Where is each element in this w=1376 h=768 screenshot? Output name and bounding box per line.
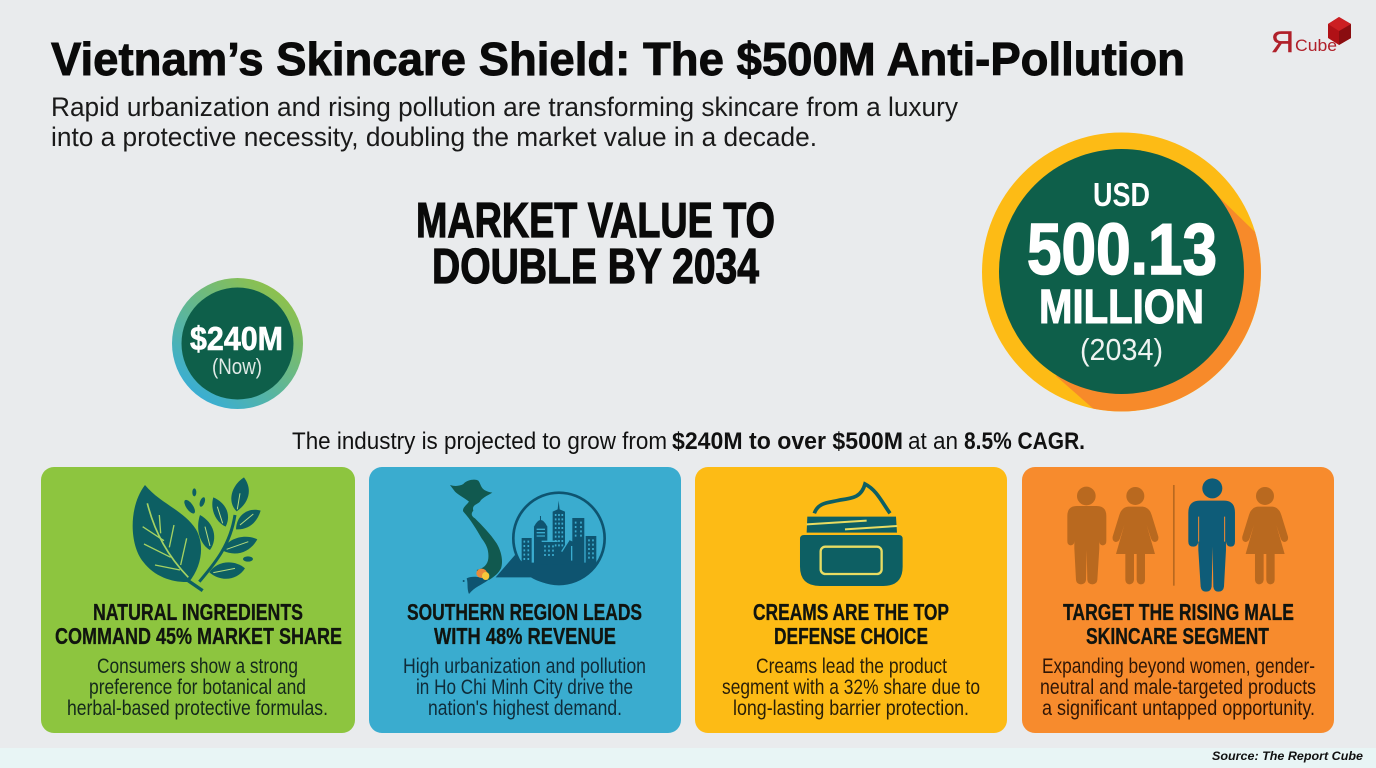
body text: in Ho Chi Minh City drive the (416, 676, 633, 699)
icon: map and city (450, 480, 605, 594)
heading: TARGET THE RISING MALE (1063, 599, 1294, 625)
icon: cream jar (800, 484, 903, 586)
body text: nation's highest demand. (428, 697, 622, 720)
growth statement: The industry is projected to grow from (292, 428, 667, 455)
heading: WITH 48% REVENUE (434, 623, 616, 649)
badge: now value: (Now) (212, 354, 262, 379)
growth statement: 8.5% CAGR. (964, 428, 1085, 455)
panel: southern region (369, 467, 681, 733)
heading: NATURAL INGREDIENTS (93, 599, 303, 625)
heading: DEFENSE CHOICE (774, 623, 928, 649)
heading: market value (416, 194, 775, 294)
body text (722, 655, 980, 720)
body text (67, 655, 328, 720)
subtitle: Rapid urbanization and rising pollution are transforming skincare from a luxury (51, 92, 958, 122)
body text: High urbanization and pollution (403, 655, 646, 678)
badge: 2034 value: (2034) (1080, 332, 1163, 367)
badge: 2034 value: USD (1093, 176, 1150, 213)
heading: SOUTHERN REGION LEADS (407, 599, 642, 625)
subtitle (51, 92, 958, 152)
subtitle: into a protective necessity, doubling the market value in a decade. (51, 122, 817, 152)
heading (407, 599, 642, 649)
body text: Expanding beyond women, gender- (1042, 655, 1315, 678)
source note: Source: The Report Cube (1212, 749, 1363, 763)
body text: neutral and male-targeted products (1040, 676, 1316, 699)
growth statement: $240M to over $500M (672, 428, 903, 455)
heading: CREAMS ARE THE TOP (753, 599, 949, 625)
body text: segment with a 32% share due to (722, 676, 980, 699)
logo cube (1328, 17, 1351, 45)
logo: Cube (1295, 36, 1337, 55)
badge: 2034 value (982, 132, 1261, 412)
body text: herbal-based protective formulas. (67, 697, 328, 720)
body text: a significant untapped opportunity. (1042, 697, 1315, 720)
title: Vietnam’s Skincare Shield: The $500M Anti-Pollution (51, 33, 1185, 85)
heading (1063, 599, 1294, 649)
panel: natural ingredients (41, 467, 355, 733)
heading (753, 599, 949, 649)
icon: leaves (133, 477, 261, 591)
logo: Я (1271, 26, 1294, 59)
panel: male segment (1022, 467, 1334, 733)
icon: people (1067, 478, 1288, 592)
heading: market value: MARKET VALUE TO (416, 194, 775, 248)
panel: creams (695, 467, 1007, 733)
badge: now value: $240M (190, 320, 283, 357)
body text (403, 655, 646, 720)
body text: preference for botanical and (89, 676, 306, 699)
logo (1271, 17, 1351, 59)
badge: now value (172, 278, 303, 409)
badge: 2034 value: MILLION (1039, 281, 1204, 334)
body text: Consumers show a strong (97, 655, 298, 678)
body text: long-lasting barrier protection. (733, 697, 969, 720)
body text (1040, 655, 1316, 720)
heading: SKINCARE SEGMENT (1086, 623, 1269, 649)
growth statement (292, 428, 1085, 455)
heading: market value: DOUBLE BY 2034 (432, 240, 759, 294)
badge: 2034 value: 500.13 (1027, 210, 1217, 290)
body text: Creams lead the product (756, 655, 947, 678)
heading: COMMAND 45% MARKET SHARE (55, 623, 342, 649)
growth statement: at an (908, 428, 958, 455)
heading (55, 599, 342, 649)
